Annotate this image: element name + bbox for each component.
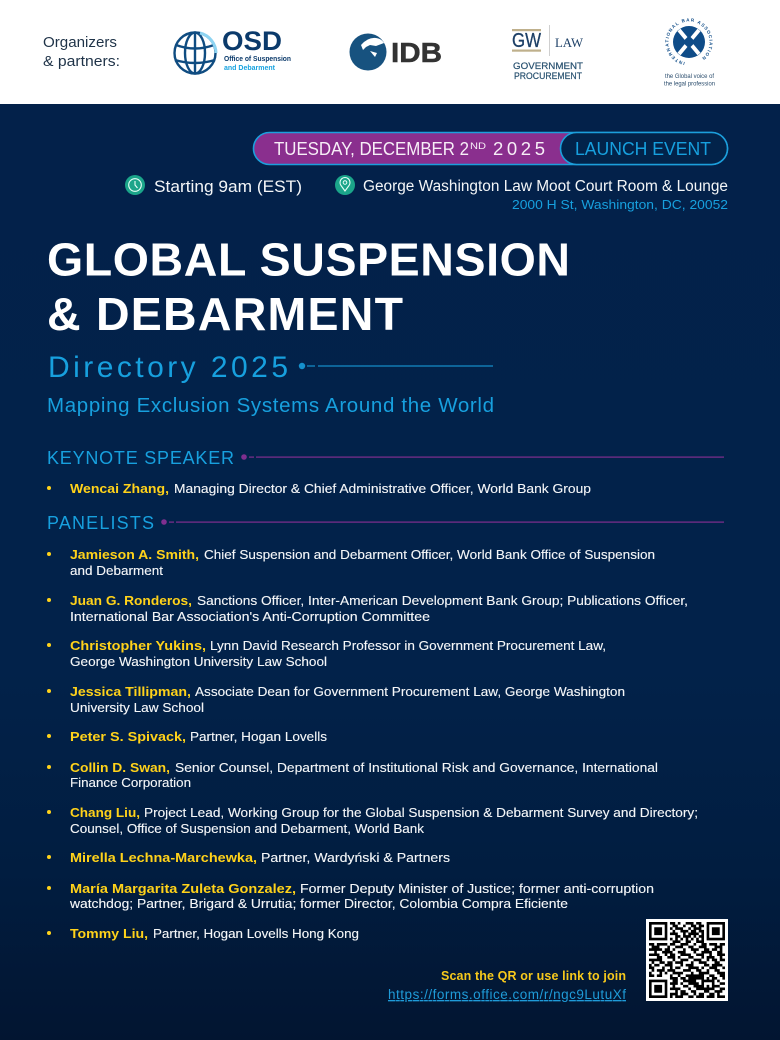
panelist: Juan G. Ronderos: Juan G. Ronderos, — [70, 593, 192, 608]
panelist: Christopher Yukins — [47, 638, 606, 669]
logo: GW Law: LAW — [555, 36, 583, 50]
panelist: Juan G. Ronderos: Sanctions Officer, Inter-American Development Bank Group; Publications Officer, — [197, 594, 688, 608]
subtitle divider — [299, 363, 493, 369]
panelist: Mirella Lechna-Marchewka — [47, 850, 450, 865]
organizers label: Organizers — [43, 35, 117, 51]
logo: GW Law: PROCUREMENT — [514, 71, 582, 82]
panelist: María Margarita Zuleta Gonzalez — [47, 881, 654, 911]
panelist: Peter S. Spivack: Partner, Hogan Lovells — [190, 730, 327, 744]
event date pill: TUESDAY, DECEMBER 2 — [274, 138, 469, 159]
panelist: Collin D. Swan: Senior Counsel, Department of Institutional Risk and Governance, International — [175, 761, 658, 775]
panelist: Tommy Liu — [47, 926, 359, 941]
logo: OSD — [174, 26, 291, 74]
logo: OSD: and Debarment — [224, 65, 276, 72]
panelist: Tommy Liu: Tommy Liu, — [70, 926, 148, 941]
keynote entry: Wencai Zhang, — [70, 481, 169, 496]
panelist: Collin D. Swan — [47, 760, 658, 790]
panelists list — [47, 547, 698, 941]
panelist: Tommy Liu: Partner, Hogan Lovells Hong Kong — [153, 927, 359, 941]
event date pill: ND — [470, 141, 487, 151]
start time: Starting 9am (EST) — [154, 178, 302, 196]
icon: clock — [125, 175, 145, 195]
logo: GW Law — [512, 25, 583, 82]
panelist: Jamieson A. Smith: Chief Suspension and Debarment Officer, World Bank Office of Suspension — [204, 548, 655, 562]
heading: panelists: PANELISTS — [47, 513, 154, 533]
logo: GW Law: GW — [512, 30, 541, 52]
keynote divider — [241, 454, 724, 460]
heading: keynote speaker: KEYNOTE SPEAKER — [47, 448, 234, 468]
panelist: Jamieson A. Smith: and Debarment — [70, 564, 164, 578]
main title: & DEBARMENT — [47, 288, 403, 340]
panelist: María Margarita Zuleta Gonzalez: María Margarita Zuleta Gonzalez, — [70, 881, 296, 896]
keynote entry: Managing Director & Chief Administrative Officer, World Bank Group — [174, 482, 591, 496]
panelist: Chang Liu: Chang Liu, — [70, 805, 140, 820]
white logo header band — [0, 0, 780, 104]
logo: International Bar Association — [664, 18, 715, 88]
venue: George Washington Law Moot Court Room & Lounge — [363, 178, 728, 195]
panelist: Christopher Yukins: Christopher Yukins, — [70, 638, 206, 653]
tagline: Mapping Exclusion Systems Around the World — [47, 394, 494, 417]
logo: OSD: OSD — [222, 26, 282, 56]
panelist: Collin D. Swan: Finance Corporation — [70, 776, 191, 790]
panelist: Christopher Yukins: Lynn David Research Professor in Government Procurement Law, — [210, 639, 606, 653]
panelist: Mirella Lechna-Marchewka: Partner, Wardyński & Partners — [261, 851, 450, 865]
logo: IDB: IDB — [391, 37, 442, 68]
panelist: Jessica Tillipman: University Law School — [70, 701, 204, 715]
panelist: Chang Liu: Project Lead, Working Group for the Global Suspension & Debarment Survey and Directory; — [144, 806, 698, 820]
logo: GW Law: GOVERNMENT — [513, 61, 583, 72]
panelist: Collin D. Swan: Collin D. Swan, — [70, 760, 170, 775]
panelist: Peter S. Spivack: Peter S. Spivack, — [70, 729, 186, 744]
panelists divider — [161, 519, 724, 525]
panelist: Jamieson A. Smith — [47, 547, 655, 578]
event date pill — [254, 132, 728, 164]
panelist: Jessica Tillipman: Jessica Tillipman, — [70, 684, 191, 699]
panelist: Chang Liu: Counsel, Office of Suspension and Debarment, World Bank — [70, 822, 425, 836]
organizers label — [43, 35, 120, 70]
panelist: María Margarita Zuleta Gonzalez: watchdog; Partner, Brigard & Urrutia; former Director, Colombia Compra Eficiente — [69, 897, 568, 911]
main title — [47, 234, 570, 340]
QR call to action: Scan the QR or use link to join — [441, 969, 626, 983]
logo: International Bar Association: the Global voice of — [665, 73, 714, 80]
logo: International Bar Association: INTERNATIONAL BAR ASSOCIATION — [665, 18, 713, 65]
organizers label: & partners: — [43, 54, 120, 70]
panelist: Peter S. Spivack — [47, 729, 327, 744]
main title: GLOBAL SUSPENSION — [47, 234, 570, 286]
panelist: Jamieson A. Smith: Jamieson A. Smith, — [70, 547, 199, 562]
panelist: Chang Liu — [47, 805, 698, 836]
panelist: Juan G. Ronderos — [47, 593, 688, 624]
panelist: Jessica Tillipman — [47, 684, 625, 715]
logo: OSD: Office of Suspension — [224, 56, 291, 63]
keynote entry — [47, 481, 591, 496]
panelist: Mirella Lechna-Marchewka: Mirella Lechna-Marchewka, — [70, 850, 257, 865]
icon: location pin — [335, 175, 355, 195]
panelist: Christopher Yukins: George Washington University Law School — [70, 655, 327, 669]
panelist: Jessica Tillipman: Associate Dean for Government Procurement Law, George Washington — [195, 685, 625, 699]
event date pill: LAUNCH EVENT — [575, 138, 711, 159]
event date pill: 2025 — [493, 138, 545, 159]
subtitle: Directory 2025: Directory 2025 — [48, 351, 288, 384]
logo: International Bar Association: the legal profession — [664, 80, 715, 88]
registration link: https://forms.office.com/r/ngc9LutuXf — [388, 987, 626, 1002]
panelist: María Margarita Zuleta Gonzalez: Former Deputy Minister of Justice; former anti-corruption — [300, 882, 654, 896]
QR code — [646, 919, 728, 1001]
panelist: Juan G. Ronderos: International Bar Association's Anti-Corruption Committee — [70, 610, 430, 624]
address: 2000 H St, Washington, DC, 20052 — [512, 197, 728, 212]
logo: IDB — [350, 34, 442, 70]
